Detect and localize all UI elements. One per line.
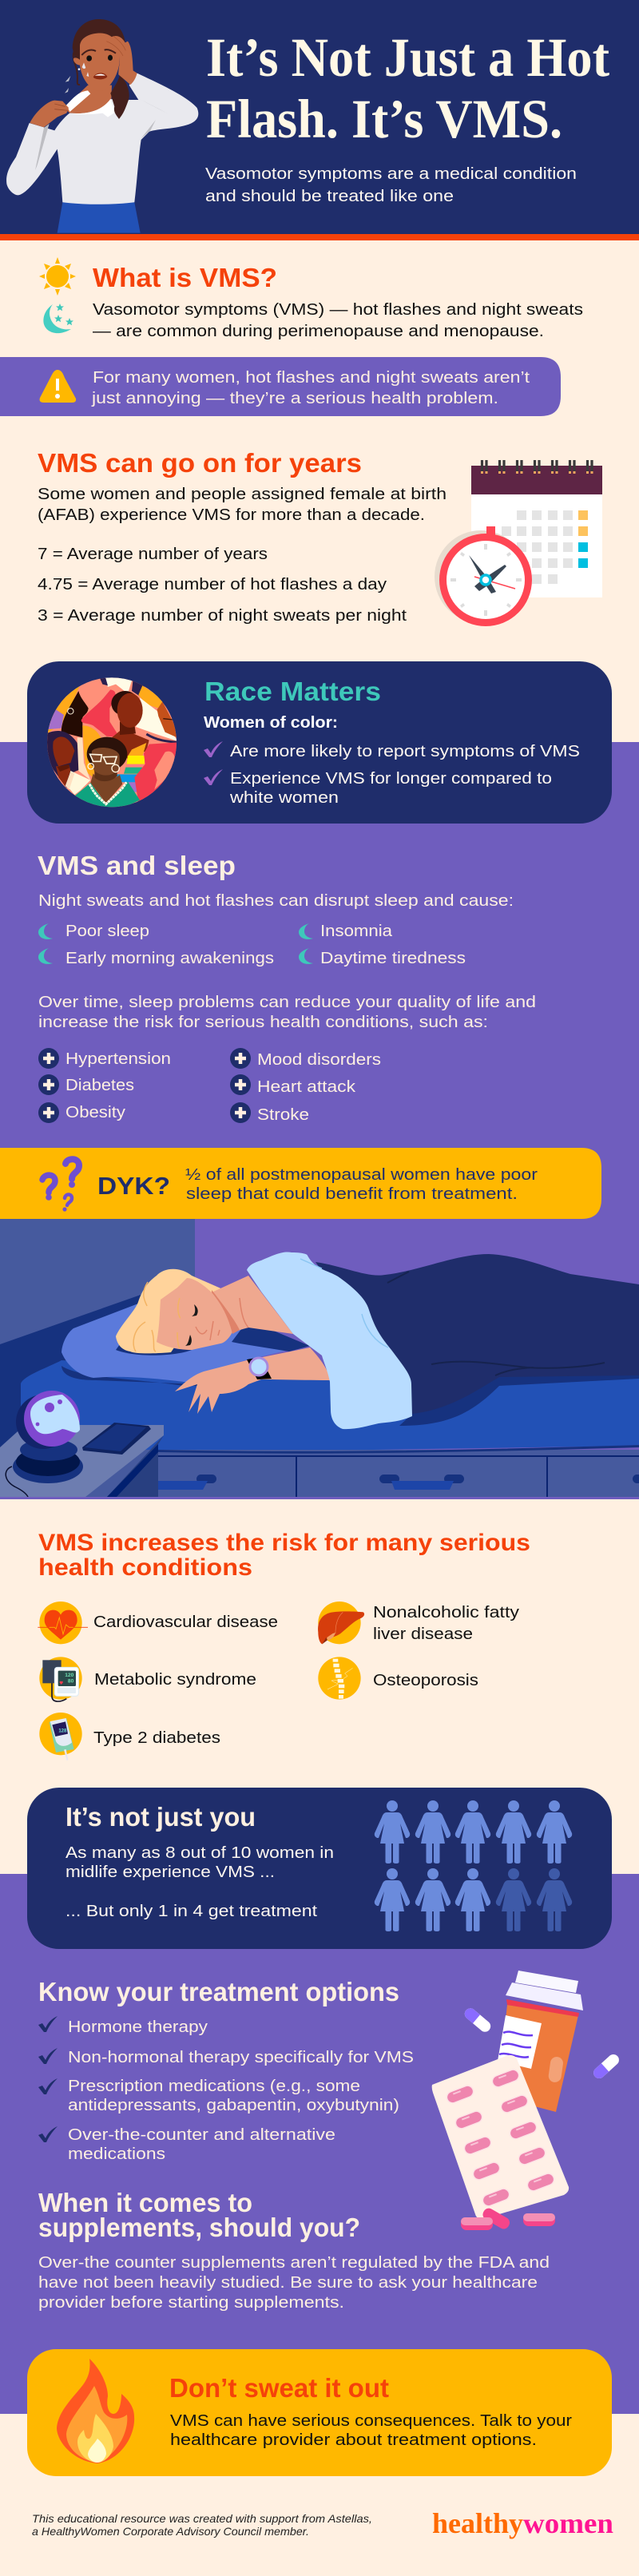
list: health conditions: Stroke: [257, 1106, 309, 1124]
heading: VMS increases the risk for many serious: [38, 1530, 530, 1556]
footer: sponsor note: [32, 2512, 372, 2538]
body text: increase the risk for serious health conditions, such as:: [38, 1014, 488, 1031]
panel: it's not just you: [27, 1788, 612, 1949]
heading: Know your treatment options: [38, 1977, 399, 2006]
illustration: stressed woman: [6, 19, 198, 233]
heading: [38, 1530, 530, 1581]
header banner: [0, 0, 639, 240]
intro text: Night sweats and hot flashes can disrupt sleep and cause:: [38, 892, 514, 910]
definition text: — are common during perimenopause and menopause.: [93, 323, 544, 340]
icon: glucose meter: [39, 1713, 82, 1760]
heading: [38, 2188, 360, 2242]
heading: Don’t sweat it out: [169, 2373, 389, 2403]
subheading: Women of color:: [204, 714, 338, 732]
checklist: antidepressants, gabapentin, oxybutynin): [68, 2097, 399, 2114]
condition labels: Type 2 diabetes: [93, 1729, 220, 1747]
statistics: [38, 546, 407, 625]
icon: blood pressure monitor: [39, 1657, 82, 1701]
illustration: pill bottle and blister pack: [432, 1971, 621, 2231]
callout text: [185, 1166, 538, 1203]
callout text: healthcare provider about treatment options.: [170, 2431, 537, 2449]
title: It’s Not Just a Hot: [206, 27, 609, 88]
panel text: midlife experience VMS ...: [65, 1864, 275, 1881]
list: health conditions: Mood disorders: [257, 1051, 381, 1069]
illustration: women of color: [47, 677, 177, 807]
list: health conditions: Heart attack: [257, 1078, 356, 1096]
panel text: ... But only 1 in 4 get treatment: [65, 1903, 318, 1920]
callout text: [91, 369, 530, 407]
logo: healthywomen: healthy: [432, 2507, 523, 2539]
body text: provider before starting supplements.: [38, 2294, 344, 2312]
checklist: Non-hormonal therapy specifically for VMS: [68, 2049, 414, 2066]
checklist: [204, 741, 580, 807]
condition labels: Osteoporosis: [373, 1672, 478, 1689]
statistics: 7 = Average number of years: [38, 546, 268, 563]
heading: When it comes to: [38, 2188, 252, 2217]
condition labels: Nonalcoholic fatty: [373, 1604, 519, 1621]
footer: sponsor note: This educational resource was created with support from Astellas,: [32, 2512, 372, 2525]
body text: have not been heavily studied. Be sure to ask your healthcare: [38, 2274, 538, 2292]
list: health conditions: Hypertension: [65, 1050, 171, 1068]
icon: blood pressure monitor: 120: [65, 1673, 74, 1678]
panel: supplements: [38, 2188, 550, 2312]
condition labels: [93, 1604, 519, 1747]
heading: It’s not just you: [65, 1802, 256, 1832]
checklist: white women: [229, 789, 339, 807]
icon: warning: [40, 370, 76, 403]
panel text: [65, 1844, 334, 1920]
list: sleep effects: Insomnia: [320, 923, 393, 940]
callout: serious health problem: [0, 357, 561, 416]
panel: treatment options: [38, 1971, 621, 2231]
icon: liver: [318, 1602, 364, 1644]
list: sleep effects: Early morning awakenings: [65, 950, 274, 967]
heading: Race Matters: [204, 677, 381, 706]
checklist: Prescription medications (e.g., some: [68, 2078, 360, 2095]
panel: what is VMS: [39, 257, 583, 340]
subtitle: Vasomotor symptoms are a medical condition: [205, 165, 577, 183]
checklist: [38, 2016, 414, 2163]
intro text: [38, 486, 447, 524]
panel text: As many as 8 out of 10 women in: [65, 1844, 334, 1862]
callout text: sleep that could benefit from treatment.: [186, 1185, 518, 1203]
logo: healthywomen: women: [523, 2507, 613, 2539]
panel: race matters: [27, 661, 612, 824]
callout text: [170, 2412, 572, 2449]
condition labels: Metabolic syndrome: [94, 1671, 256, 1689]
statistics: 4.75 = Average number of hot flashes a day: [38, 576, 387, 593]
body text: [38, 994, 536, 1031]
definition text: Vasomotor symptoms (VMS) — hot flashes and night sweats: [93, 301, 583, 319]
icon: spine: [318, 1657, 361, 1700]
logo: healthywomen: [432, 2507, 613, 2539]
illustration: woman sleeping in bed: [0, 1219, 639, 1499]
list: sleep effects: Daytime tiredness: [320, 950, 466, 967]
checklist: Experience VMS for longer compared to: [230, 770, 552, 788]
definition text: [93, 301, 583, 340]
checklist: medications: [68, 2145, 165, 2163]
heading: What is VMS?: [93, 263, 277, 292]
heading: VMS and sleep: [38, 851, 236, 880]
subtitle: [205, 165, 577, 205]
callout text: ½ of all postmenopausal women have poor: [185, 1166, 538, 1184]
icon: glucose meter: 128: [58, 1729, 67, 1733]
icon: question marks: [42, 1159, 79, 1212]
intro text: Some women and people assigned female at birth: [38, 486, 447, 503]
heading: health conditions: [38, 1554, 252, 1581]
icon: calendar: [471, 460, 602, 597]
list: sleep effects: Poor sleep: [65, 923, 149, 940]
callout text: just annoying — they’re a serious health problem.: [91, 390, 498, 407]
list: health conditions: Diabetes: [65, 1077, 134, 1094]
callout: don't sweat it out: [27, 2349, 612, 2476]
subtitle: and should be treated like one: [205, 188, 454, 205]
callout text: VMS can have serious consequences. Talk to your: [170, 2412, 572, 2430]
checklist: Hormone therapy: [68, 2018, 208, 2036]
title: Flash. It’s VMS.: [206, 89, 562, 149]
panel: serious health conditions: [38, 1530, 530, 1760]
list: sleep effects: [38, 923, 466, 967]
heading: VMS can go on for years: [38, 448, 362, 478]
list: health conditions: [38, 1048, 381, 1124]
body text: Over-the counter supplements aren’t regulated by the FDA and: [38, 2254, 550, 2272]
callout: did you know: [0, 1148, 601, 1219]
checklist: Over-the-counter and alternative: [68, 2126, 335, 2144]
condition labels: liver disease: [373, 1625, 473, 1643]
icon: sun: [39, 257, 76, 296]
footer: sponsor note: a HealthyWomen Corporate Advisory Council member.: [32, 2525, 309, 2538]
icon: flame: [57, 2359, 134, 2463]
list: health conditions: Obesity: [65, 1104, 125, 1121]
panel: VMS can go on for years: [38, 448, 602, 626]
icon: blood pressure monitor: 80: [68, 1679, 74, 1685]
icon: clock: [435, 526, 532, 626]
condition labels: Cardiovascular disease: [93, 1613, 278, 1631]
body text: [38, 2254, 550, 2312]
title: [206, 27, 609, 149]
label: DYK?: [97, 1172, 170, 1200]
icon: heart: [38, 1602, 88, 1644]
panel: VMS and sleep: [38, 851, 536, 1124]
callout text: For many women, hot flashes and night sweats aren’t: [93, 369, 530, 387]
icon: moon and stars: [43, 304, 73, 333]
checklist: Are more likely to report symptoms of VMS: [230, 743, 580, 760]
pictogram: 8 of 10 women: [375, 1800, 572, 1931]
intro text: (AFAB) experience VMS for more than a decade.: [38, 506, 425, 524]
statistics: 3 = Average number of night sweats per night: [38, 607, 407, 625]
heading: supplements, should you?: [38, 2213, 360, 2242]
body text: Over time, sleep problems can reduce your quality of life and: [38, 994, 536, 1011]
